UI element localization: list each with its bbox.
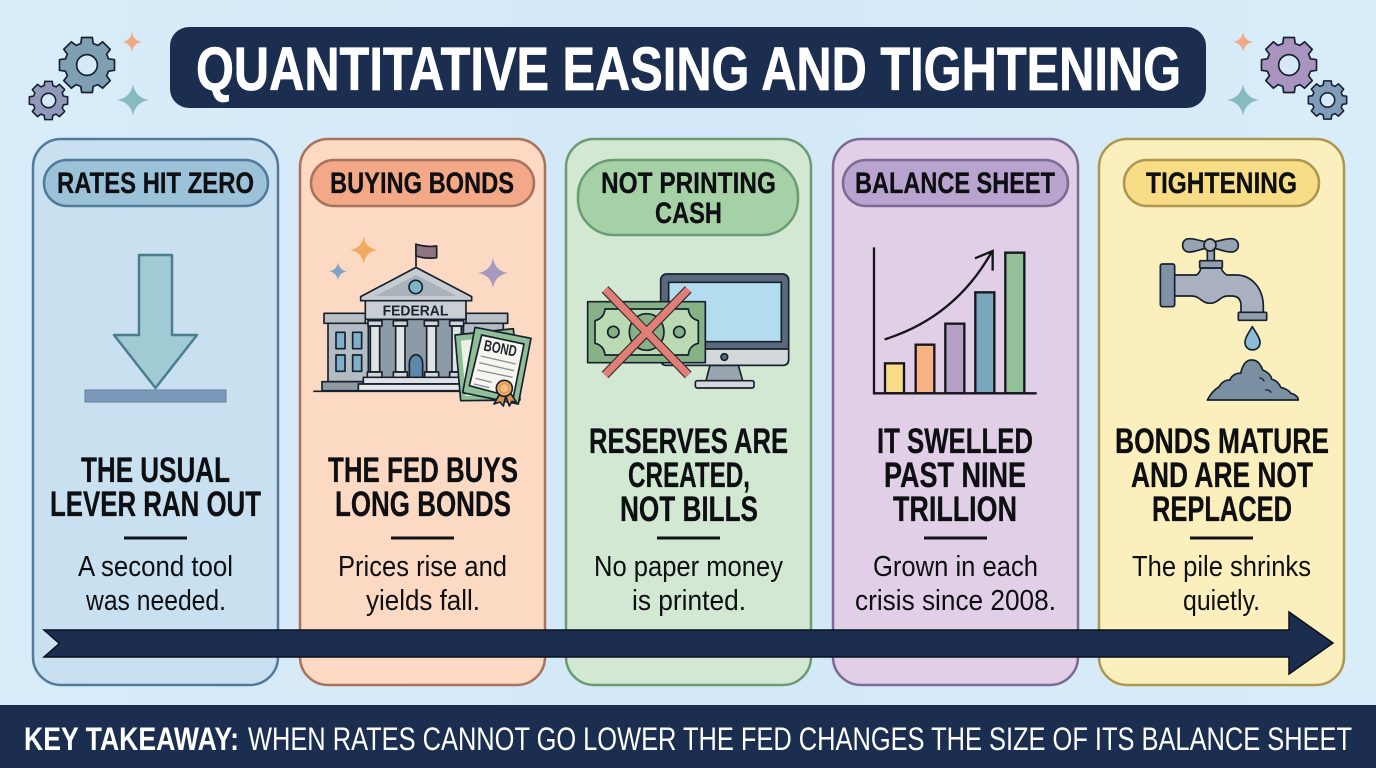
key takeaway banner [0, 705, 1376, 768]
icon: down arrow hitting floor [85, 255, 226, 402]
pill heading: rates hit zero [44, 160, 268, 206]
panel: balance sheet [833, 139, 1078, 685]
body text: prices rise and yields fall: yields fall. [366, 585, 480, 617]
heading: it swelled past nine trillion [877, 422, 1033, 529]
heading: the fed buys long bonds [328, 451, 518, 524]
panel: not printing cash [566, 139, 811, 685]
pill heading: not printing cash: CASH [655, 197, 722, 230]
body text: prices rise and yields fall: Prices rise and [338, 551, 507, 583]
pill heading: not printing cash: NOT PRINTING [601, 167, 776, 200]
heading: the usual lever ran out [50, 451, 261, 524]
panel: buying bonds [300, 139, 545, 685]
decoration: left gears and sparkles [29, 32, 149, 120]
body text: prices rise and yields fall [338, 551, 507, 617]
arrow: timeline across panels [44, 612, 1333, 674]
body text: grown in each crisis since 2008 [855, 551, 1056, 617]
body text: the pile shrinks quietly: The pile shrinks [1132, 551, 1311, 583]
icon: small gear right [1308, 81, 1347, 119]
heading: the usual lever ran out: THE USUAL [81, 451, 230, 490]
pill heading: balance sheet: BALANCE SHEET [855, 167, 1055, 200]
body text: no paper money is printed: is printed. [632, 585, 746, 617]
icon: orange sparkle left [122, 32, 142, 52]
heading: bonds mature and are not replaced: AND ARE NOT [1131, 456, 1313, 495]
icon: orange sparkle right [1233, 32, 1253, 52]
decoration: right gears and sparkles [1227, 32, 1347, 119]
body text: grown in each crisis since 2008: crisis since 2008. [855, 585, 1056, 617]
heading: reserves are created, not bills: RESERVES ARE [589, 422, 788, 461]
pill heading: buying bonds: BUYING BONDS [330, 167, 514, 200]
pill heading: tightening [1124, 160, 1319, 206]
body text: a second tool was needed [78, 551, 233, 617]
body text: no paper money is printed [594, 551, 783, 617]
heading: bonds mature and are not replaced [1115, 422, 1329, 529]
chart: rising bars with growth arrow [874, 247, 1037, 393]
pill heading: buying bonds [311, 160, 534, 206]
pill heading: balance sheet [843, 160, 1068, 206]
pill heading: rates hit zero: RATES HIT ZERO [57, 167, 254, 200]
icon: crossed out banknote and computer monitor [588, 274, 789, 388]
heading: the fed buys long bonds: THE FED BUYS [328, 451, 518, 490]
body text: a second tool was needed: was needed. [85, 585, 226, 617]
icon: teal sparkle left [117, 84, 149, 116]
pill heading: tightening: TIGHTENING [1146, 167, 1297, 200]
body text: the pile shrinks quietly [1132, 551, 1311, 617]
heading: it swelled past nine trillion: IT SWELLED [877, 422, 1033, 461]
key takeaway banner: KEY TAKEAWAY: [24, 721, 239, 757]
heading: reserves are created, not bills: CREATED, [628, 456, 750, 495]
icon: large gear left [60, 38, 114, 92]
body text: grown in each crisis since 2008: Grown in each [873, 551, 1038, 583]
heading: it swelled past nine trillion: TRILLION [893, 490, 1017, 529]
icon: large gear right [1262, 38, 1316, 92]
panel: tightening [1099, 139, 1344, 685]
heading: reserves are created, not bills: NOT BILLS [620, 490, 758, 529]
icon: federal building with bond certificates: BOND [482, 338, 518, 361]
heading: the usual lever ran out: LEVER RAN OUT [50, 485, 261, 524]
icon: teal sparkle right [1227, 84, 1259, 116]
heading: reserves are created, not bills [589, 422, 788, 529]
pill heading: not printing cash [578, 160, 798, 235]
icon: federal building with bond certificates: FEDERAL [383, 303, 448, 319]
icon: federal building with bond certificates [313, 236, 531, 406]
heading: the fed buys long bonds: LONG BONDS [335, 485, 511, 524]
body text: the pile shrinks quietly: quietly. [1183, 585, 1260, 617]
body text: no paper money is printed: No paper money [594, 551, 783, 583]
body text: a second tool was needed: A second tool [78, 551, 233, 583]
heading: bonds mature and are not replaced: REPLACED [1152, 490, 1292, 529]
panel: rates hit zero [33, 139, 278, 685]
icon: dripping tap over shrinking pile [1160, 239, 1298, 400]
heading: it swelled past nine trillion: PAST NINE [884, 456, 1026, 495]
icon: small gear left [29, 81, 68, 120]
